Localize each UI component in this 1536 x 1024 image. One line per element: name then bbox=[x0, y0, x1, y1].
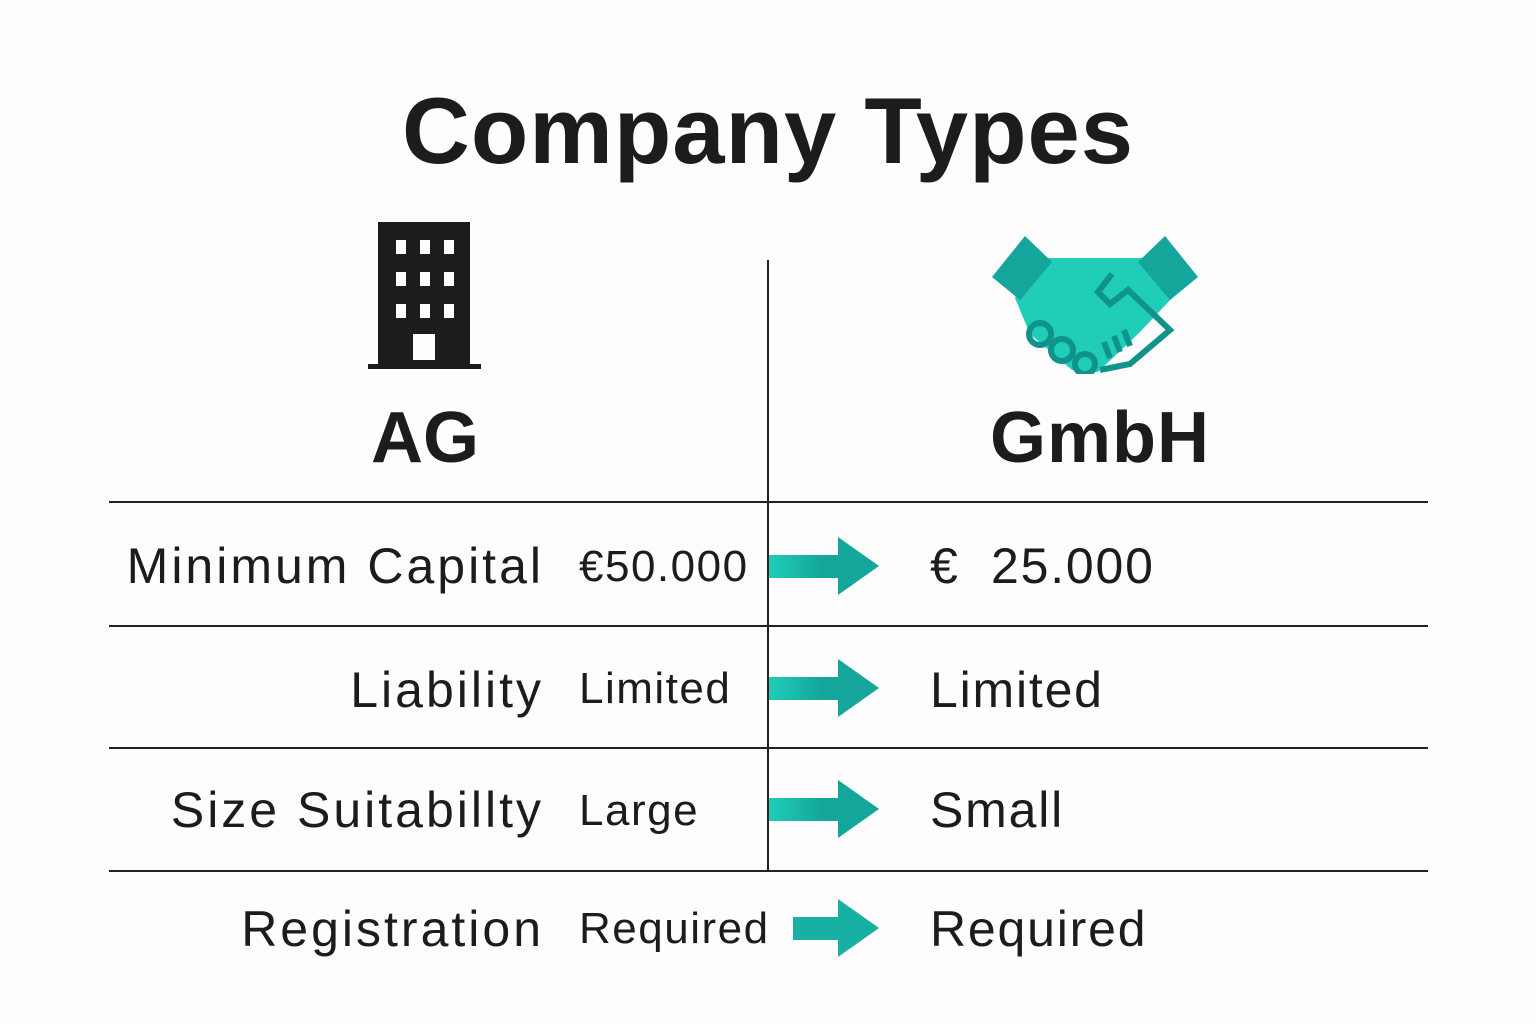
icon: handshake bbox=[992, 236, 1198, 374]
AG value: Large bbox=[579, 786, 699, 835]
row: minimum capital bbox=[127, 537, 1155, 595]
icon: building bbox=[368, 222, 481, 369]
label: Liability bbox=[350, 662, 544, 718]
label: Size Suitabillty bbox=[171, 782, 544, 838]
title: Company Types bbox=[402, 78, 1134, 183]
label: Registration bbox=[241, 901, 544, 957]
arrow bbox=[769, 659, 879, 717]
AG value: Required bbox=[579, 904, 770, 953]
arrow bbox=[793, 899, 879, 957]
heading: AG: AG bbox=[371, 398, 479, 478]
heading: GmbH: GmbH bbox=[990, 398, 1210, 478]
AG value: €50.000 bbox=[579, 542, 749, 591]
GmbH value: Required bbox=[930, 901, 1147, 957]
label: Minimum Capital bbox=[127, 538, 544, 594]
GmbH value: Small bbox=[930, 782, 1064, 838]
AG value: Limited bbox=[579, 664, 731, 713]
arrow bbox=[769, 537, 879, 595]
GmbH value: € 25.000 bbox=[930, 538, 1155, 594]
row: size suitability bbox=[171, 780, 1064, 838]
arrow bbox=[769, 780, 879, 838]
row: liability bbox=[350, 659, 1104, 718]
GmbH value: Limited bbox=[930, 662, 1104, 718]
row: registration bbox=[241, 899, 1147, 957]
